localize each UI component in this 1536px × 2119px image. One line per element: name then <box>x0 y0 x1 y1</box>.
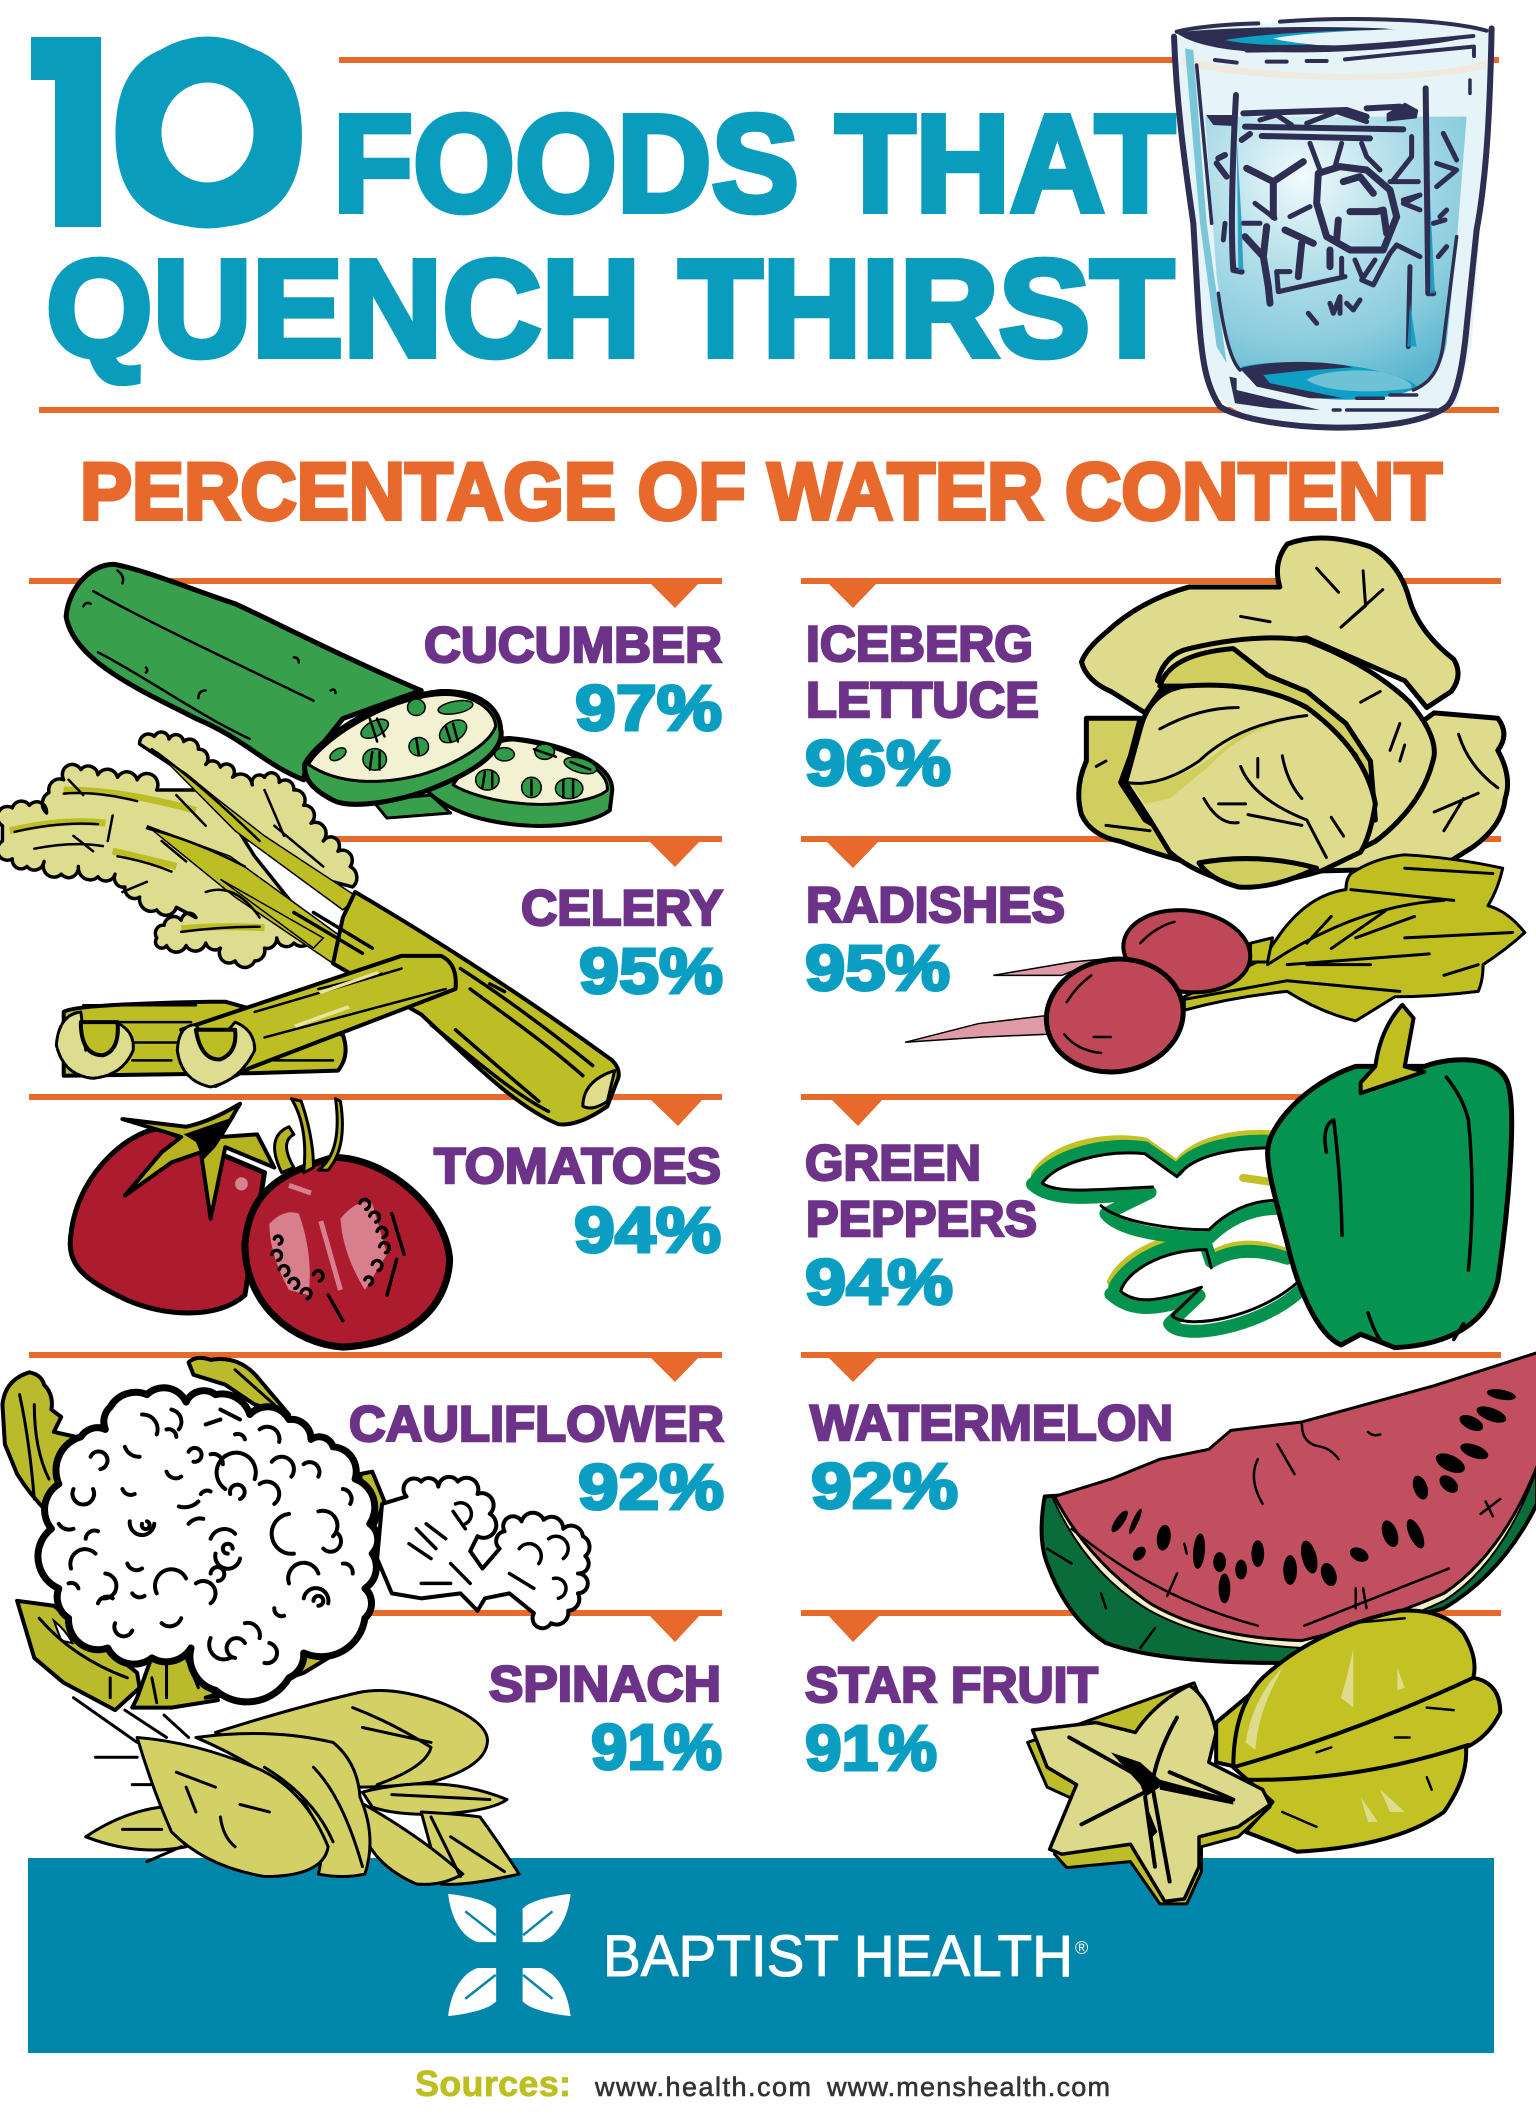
label: iceberg lettuce: 96% <box>805 727 951 799</box>
label: spinach: 91% <box>591 1711 722 1783</box>
label: spinach: SPINACH <box>489 1656 721 1712</box>
illustration: radishes <box>905 855 1525 1079</box>
illustration: cauliflower <box>2 1358 590 1710</box>
label: cauliflower: CAULIFLOWER <box>349 1396 724 1452</box>
label: green peppers: 94% <box>805 1246 953 1318</box>
label: star fruit: STAR FRUIT <box>805 1657 1098 1713</box>
footer bar <box>28 1858 1494 2053</box>
title number 10 <box>31 36 302 228</box>
illustration: tomatoes <box>70 1099 450 1347</box>
label: watermelon <box>810 1395 1173 1522</box>
subtitle: PERCENTAGE OF WATER CONTENT <box>80 447 1442 537</box>
title line: foods that: FOODS THAT <box>333 87 1175 241</box>
illustration: spinach <box>73 1690 519 1884</box>
label: tomatoes <box>434 1138 721 1266</box>
label: radishes: RADISHES <box>806 877 1065 933</box>
label: tomatoes: 94% <box>574 1194 721 1266</box>
registered mark: ® <box>1075 1938 1088 1958</box>
label: celery <box>521 880 723 1007</box>
label: cucumber <box>424 617 722 744</box>
illustration: celery <box>0 732 619 1124</box>
illustration: green peppers <box>1032 1005 1512 1348</box>
title line: quench thirst: QUENCH THIRST <box>46 232 1174 386</box>
label: cauliflower: 92% <box>578 1451 724 1523</box>
label: iceberg lettuce: ICEBERG <box>806 616 1033 672</box>
label: iceberg lettuce <box>805 616 1039 799</box>
row rules and pointers <box>29 578 1501 1642</box>
illustration: iceberg lettuce <box>1079 538 1508 887</box>
label: star fruit <box>805 1657 1098 1784</box>
label: green peppers: PEPPERS <box>806 1191 1037 1247</box>
illustration: watermelon <box>1042 1352 1536 1663</box>
source url 1: www.health.com <box>594 2072 811 2102</box>
label: radishes <box>805 877 1065 1004</box>
label: cucumber: CUCUMBER <box>424 617 722 673</box>
label: green peppers <box>805 1135 1037 1318</box>
label: star fruit: 91% <box>805 1712 937 1784</box>
brand name: BAPTIST HEALTH <box>603 1924 1073 1989</box>
sources label: Sources: <box>415 2063 571 2104</box>
header top rule <box>339 57 1499 63</box>
label: iceberg lettuce: LETTUCE <box>806 672 1039 728</box>
header bottom rule <box>39 407 1499 413</box>
icon: glass of water <box>1174 19 1492 428</box>
label: watermelon: WATERMELON <box>810 1395 1173 1451</box>
label: cauliflower <box>349 1396 724 1523</box>
label: cucumber: 97% <box>575 672 722 744</box>
illustration: star fruit <box>1028 1611 1500 1904</box>
logo: four leaves <box>448 1894 571 2016</box>
source url 2: www.menshealth.com <box>826 2072 1110 2102</box>
label: spinach <box>489 1656 722 1783</box>
label: watermelon: 92% <box>811 1450 958 1522</box>
label: celery: 95% <box>579 935 723 1007</box>
label: green peppers: GREEN <box>805 1135 981 1191</box>
illustration: cucumber <box>66 564 612 826</box>
label: celery: CELERY <box>521 880 723 936</box>
label: radishes: 95% <box>805 932 950 1004</box>
label: tomatoes: TOMATOES <box>434 1138 721 1194</box>
